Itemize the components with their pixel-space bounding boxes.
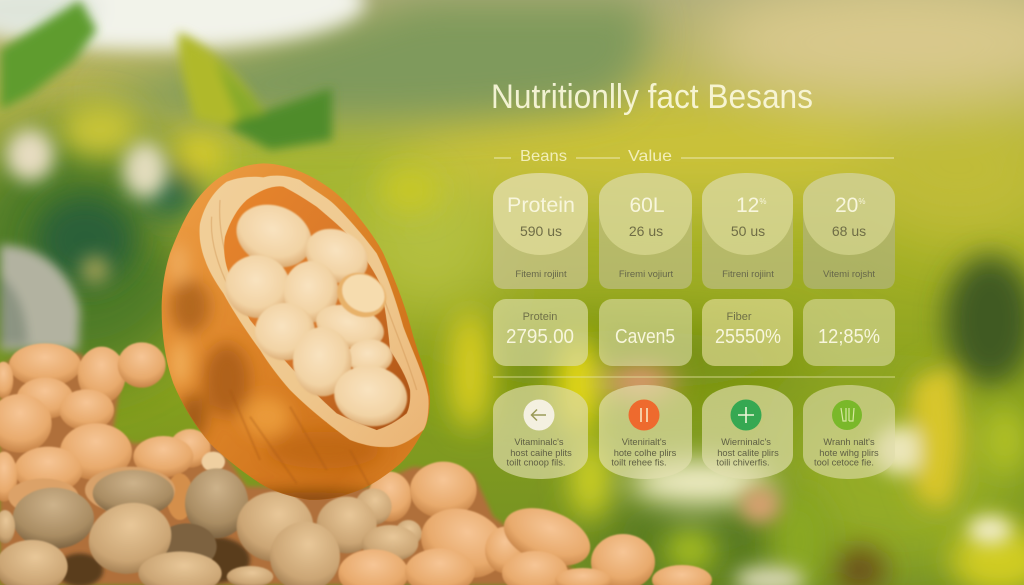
icon: green plus (730, 400, 762, 430)
card: 20 percent: Vitemi rojsht (823, 269, 875, 280)
card: vitamin plus: host calite plirs (717, 448, 779, 458)
card: protein: Protein (507, 194, 575, 217)
card: protein: 590 us (520, 223, 562, 239)
foreground leaves (0, 0, 332, 150)
card: 12 percent: Fitreni rojiint (722, 269, 774, 280)
card: vitamin back: host caihe plits (510, 448, 572, 458)
card: 60L: 60L (629, 194, 665, 217)
icon: orange utensils (628, 400, 660, 430)
card: fiber (702, 299, 793, 366)
card: vitamin plus (702, 385, 793, 479)
title: Nutritionlly fact Besans (491, 78, 813, 116)
card: 12 percent: 50 us (731, 223, 765, 239)
card: protein total (493, 299, 588, 366)
card: vitamin back: Vitaminalc's (514, 437, 564, 447)
table header (494, 148, 894, 165)
card: protein total: Protein (523, 311, 557, 323)
card: protein total: 2795.00 (506, 326, 574, 348)
card row 3 (493, 385, 895, 479)
card: percent: 12;85% (818, 326, 880, 348)
card: 20 percent: % (858, 197, 865, 206)
card: vitamin leaf (803, 385, 895, 479)
card: protein: Fitemi rojiint (515, 269, 567, 280)
header: value: Value (628, 148, 672, 165)
card: vitamin pause: Vitenirialt's (622, 437, 667, 447)
shadow under front beans (57, 537, 250, 585)
open bean pod (162, 163, 430, 508)
card row 2 (493, 299, 895, 366)
card: percent (803, 299, 895, 366)
icon: back arrow (524, 400, 554, 430)
icon: lime sprout (832, 400, 862, 430)
card: 60L: 26 us (629, 223, 663, 239)
card: 12 percent: 12 (736, 194, 759, 217)
card: vitamin pause: toilt rehee fis. (611, 458, 667, 468)
card: 20 percent (803, 173, 895, 289)
card: vitamin back: toilt cnoop fils. (507, 458, 565, 468)
card: 12 percent: % (759, 197, 766, 206)
distant hill (90, 0, 648, 122)
card: vitamin leaf: hote wihg plirs (819, 448, 879, 458)
bean pile (0, 342, 712, 585)
card: vitamin plus: Wierninalc's (721, 437, 771, 447)
pod skin mottling (168, 243, 390, 508)
card: vitamin leaf: Wranh nalt's (823, 437, 875, 447)
front beans (0, 462, 712, 585)
card: vitamin pause: hote colhe plirs (614, 448, 677, 458)
card: fiber: Fiber (726, 311, 752, 323)
card: caven5: Caven5 (615, 326, 675, 348)
card: 60L: Firemi vojiurt (619, 269, 674, 280)
header: beans: Beans (520, 148, 567, 165)
card: 20 percent: 20 (835, 194, 858, 217)
right edge beans (485, 497, 712, 585)
card: fiber: 25550% (715, 326, 781, 348)
card row 1 (493, 173, 895, 289)
card: 60L (599, 173, 692, 289)
card: protein (493, 173, 588, 289)
card: 12 percent (702, 173, 793, 289)
card: caven5 (599, 299, 692, 366)
blurred back beans (0, 342, 412, 522)
inner pod cavity (224, 186, 410, 430)
card: vitamin leaf: tool cetoce fie. (814, 458, 874, 468)
card: vitamin back (493, 385, 588, 479)
beans inside pod (218, 194, 412, 432)
card: vitamin pause (599, 385, 692, 479)
card: vitamin plus: toili chiverfis. (716, 458, 770, 468)
bean pile backing (0, 353, 587, 585)
card: 20 percent: 68 us (832, 223, 866, 239)
rock (0, 245, 80, 350)
cream inner rim (199, 176, 429, 447)
